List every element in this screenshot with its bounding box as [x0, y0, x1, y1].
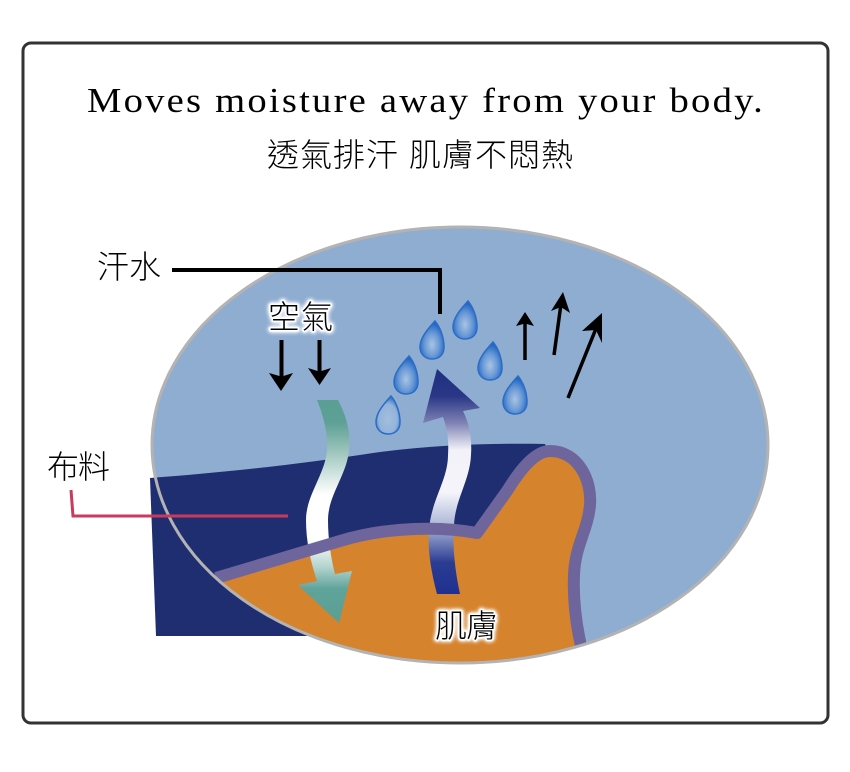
subtitle: 透氣排汗 肌膚不悶熱 [267, 137, 573, 173]
title: Moves moisture away from your body. [87, 81, 765, 120]
drop 6 [376, 396, 400, 434]
label: fabric: 布料 [47, 449, 110, 485]
air arrow: green wavy arrow [298, 400, 352, 623]
skin layer [222, 457, 584, 662]
drop 3 [394, 356, 418, 394]
moisture arrow: blue wavy arrow [423, 369, 480, 594]
label: skin: 肌膚 [435, 608, 498, 644]
drop 5 [503, 376, 527, 414]
background oval [152, 227, 768, 663]
air arrows: pointing down [269, 340, 331, 391]
drop 1 [420, 321, 444, 359]
illustration: skin and fabric cross-section [150, 227, 768, 680]
label: sweat: 汗水 [97, 249, 161, 285]
label: air: 空氣 [268, 299, 333, 335]
fabric layer [150, 444, 560, 636]
oval edge [152, 227, 768, 663]
evaporation arrows: pointing up [516, 292, 602, 398]
leader line: sweat [172, 270, 440, 314]
skin outline [216, 451, 590, 650]
drop 2 [453, 301, 477, 339]
leader line: fabric [71, 490, 288, 516]
water drops [376, 301, 527, 434]
drop 4 [478, 342, 502, 380]
